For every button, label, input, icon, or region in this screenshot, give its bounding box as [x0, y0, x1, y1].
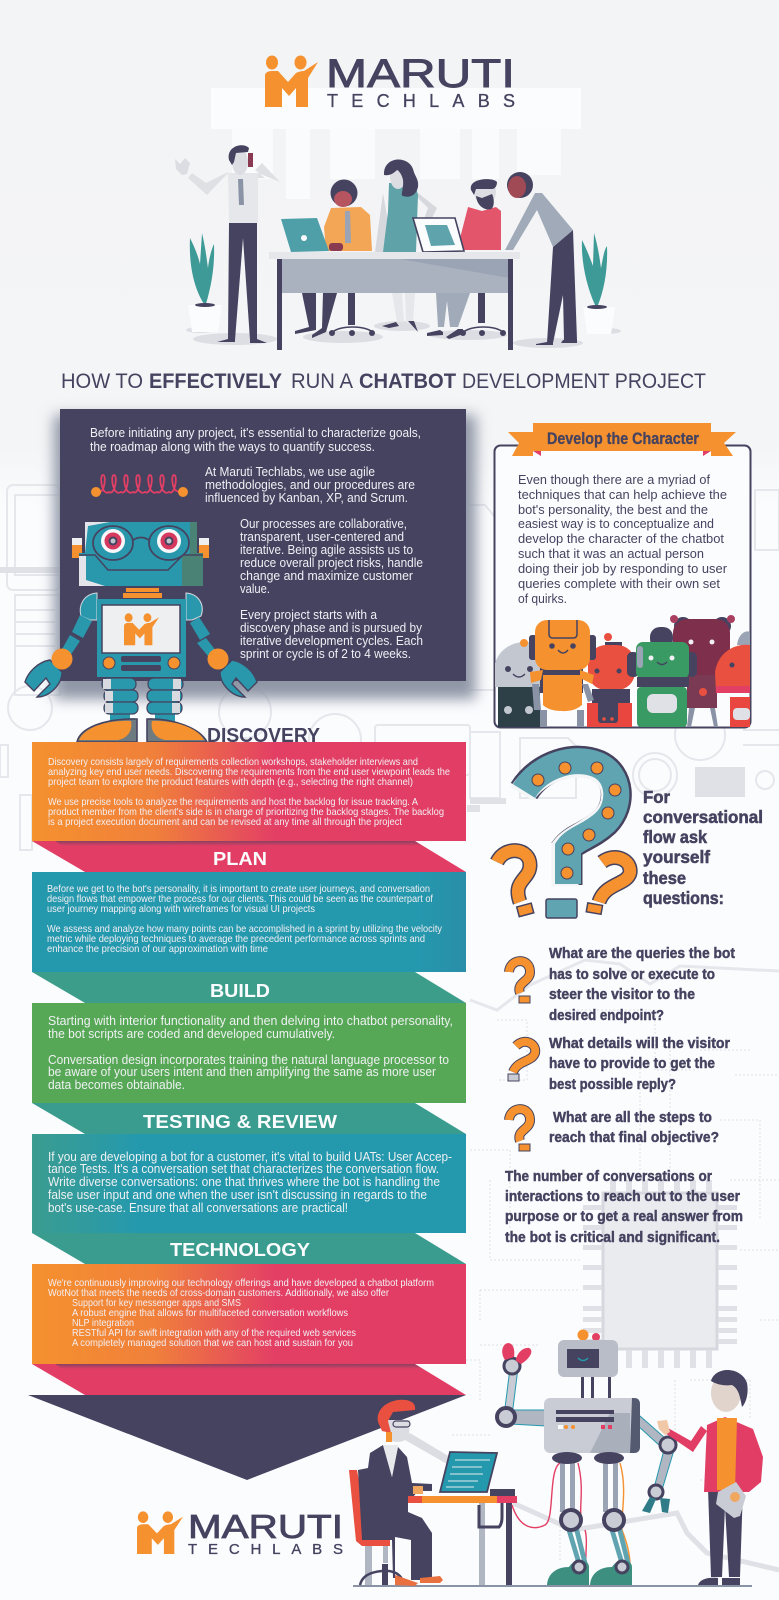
logo wordmark: MARUTI [326, 52, 515, 96]
fold: testing and review [32, 1103, 466, 1134]
discovery text: analyzing key end user needs. Discovering the requirements from the end user viewpoint leads the [48, 766, 450, 778]
discovery text [48, 756, 450, 828]
robot legs [102, 678, 183, 722]
technology text: A robust engine that allows for multifaceted conversation workflows [72, 1307, 348, 1319]
closing statement [505, 1169, 743, 1246]
plan text: user journey mapping along with wireframes for visual UI projects [47, 903, 315, 915]
character text: bot's personality, the best and the [518, 502, 708, 517]
grey robot [495, 639, 543, 727]
character text: doing their job by responding to user [518, 561, 728, 576]
monitor [413, 218, 464, 252]
illustration: robot and developers [349, 1330, 763, 1587]
build text: Starting with interior functionality and then delving into chatbot personality, [48, 1014, 453, 1028]
technology text: WotNot that meets the needs of cross-domain customers. Additionally, we also offer [48, 1287, 389, 1299]
robot body [97, 599, 186, 677]
question 1 [509, 946, 735, 1024]
ribbon banner [508, 423, 736, 456]
conversational flow heading: flow ask [643, 827, 707, 847]
cycle text: Every project starts with a [240, 607, 378, 622]
plan text: We assess and analyze how many points can be accomplished in a sprint by utilizing the velocity [47, 923, 443, 935]
closing arrow [28, 1395, 466, 1480]
seated man [295, 180, 375, 338]
character text: such that it was an actual person [518, 546, 704, 561]
closing statement: The number of conversations or [505, 1169, 712, 1185]
build text: be aware of your users intent and then amplifying the same as more user [48, 1065, 436, 1079]
question 3 text: reach that final objective? [549, 1130, 719, 1146]
robot arms [25, 593, 257, 697]
testing text: If you are developing a bot for a customer, it's vital to build UATs: User Accep- [48, 1150, 452, 1164]
logo subtitle: TECHLABS [188, 1541, 343, 1558]
testing text: bot's use-case. Ensure that all conversations are practical! [48, 1201, 348, 1215]
build text: data becomes obtainable. [48, 1078, 185, 1092]
technology text: NLP integration [72, 1317, 134, 1329]
agile squiggle icon [91, 475, 188, 497]
cycle text [240, 607, 423, 661]
intro text: the roadmap along with the ways to quantify success. [90, 439, 375, 454]
process text: reduce overall project risks, handle [240, 555, 423, 570]
title [61, 370, 706, 393]
panel: plan [32, 872, 466, 972]
conversational flow heading: For [643, 787, 670, 807]
discovery text: project team to explore the product features with depth (e.g., selecting the right channel) [48, 776, 413, 788]
plant right [582, 233, 615, 334]
man on phone [175, 145, 280, 343]
robot neck [581, 1377, 611, 1398]
footer logo [137, 1508, 343, 1558]
character text [518, 472, 728, 606]
robot group [495, 615, 750, 727]
panel: build [32, 1003, 466, 1103]
fold: plan [32, 841, 466, 872]
plant left [188, 233, 222, 332]
closing statement: the bot is critical and significant. [505, 1230, 720, 1246]
testing text [48, 1150, 452, 1215]
robot legs and feet [547, 1462, 632, 1585]
laptop [281, 218, 329, 252]
question 1 text [549, 946, 735, 1024]
plan text [47, 883, 443, 955]
green robot [627, 627, 697, 727]
orange question mark left [497, 851, 534, 917]
process text: change and maximize customer [240, 568, 414, 583]
character text: of quirks. [518, 591, 567, 606]
robot feet [77, 719, 207, 742]
orange robot [529, 620, 596, 727]
title: EFFECTIVELY [149, 370, 282, 393]
desk [269, 252, 520, 350]
logo mark [265, 56, 318, 107]
maroon robot [670, 615, 735, 727]
title: CHATBOT [359, 370, 456, 393]
cycle text: sprint or cycle is of 2 to 4 weeks. [240, 646, 411, 661]
fold: build [32, 972, 466, 1003]
robot torso [544, 1398, 640, 1464]
question 2 [508, 1036, 730, 1093]
title: HOW TO [61, 370, 143, 393]
ribbon banner: Develop the Character [547, 429, 699, 448]
agile text [205, 464, 415, 505]
plan text: metric while deploying techniques to average the precedent performance across sprints and [47, 933, 425, 945]
logo subtitle: TECHLABS [327, 91, 515, 111]
plan text: Before we get to the bot's personality, it is important to create user journeys, and conversation [47, 883, 430, 895]
technology text [48, 1277, 434, 1349]
robot controls [103, 656, 180, 671]
conversational flow heading [643, 787, 763, 908]
robot head [72, 522, 209, 586]
technology text: RESTful API for swift integration with any of the required web services [72, 1327, 356, 1339]
question 3 text: What are all the steps to [553, 1110, 712, 1126]
process text: transparent, user-centered and [240, 529, 404, 544]
discovery text: We use precise tools to analyze the requirements and host the backlog for issue tracking. A [48, 796, 418, 808]
fold: build: BUILD [210, 980, 270, 1001]
technology text: A completely managed solution that we can host and sustain for you [72, 1337, 353, 1349]
fold: technology: TECHNOLOGY [170, 1239, 311, 1260]
character text: Even though there are a myriad of [518, 472, 710, 487]
panel: develop the character [494, 423, 750, 728]
robot neck [123, 588, 162, 598]
process text [240, 516, 423, 596]
panel: agile intro [54, 409, 476, 699]
developer at desk [349, 1400, 450, 1586]
cycle text: iterative development cycles. Each [240, 633, 423, 648]
question 2 text: have to provide to get the [549, 1056, 715, 1072]
panel: technology [32, 1264, 466, 1364]
character text: develop the character of the chatbot [518, 531, 724, 546]
question 2 text: What details will the visitor [549, 1036, 730, 1052]
question 2 text [549, 1036, 730, 1093]
title: DEVELOPMENT PROJECT [462, 370, 706, 393]
question 1 text: steer the visitor to the [549, 987, 695, 1003]
orange question mark right [586, 858, 630, 914]
fold: closing [32, 1364, 466, 1395]
title: RUN A [291, 370, 353, 393]
testing text: false user input and one when the user isn't discussing in regards to the [48, 1188, 427, 1202]
banner stack [28, 725, 466, 1480]
question marks illustration [497, 761, 630, 918]
icon: question mark [508, 1042, 535, 1081]
robot screen logo [124, 613, 159, 645]
robot screen [102, 605, 180, 653]
question 1 text: What are the queries the bot [549, 946, 735, 962]
process text: iterative. Being agile assists us to [240, 542, 413, 557]
question 3 text [549, 1110, 719, 1146]
cycle text: discovery phase and is pursued by [240, 620, 422, 635]
character text: queries complete with their own set [518, 576, 720, 591]
icon: question mark [509, 1109, 530, 1151]
large question dot [546, 899, 577, 918]
question 1 text: desired endpoint? [549, 1008, 664, 1024]
plan text: enhance the precision of our approximation with time [47, 943, 268, 955]
conversational flow heading: these [643, 868, 686, 888]
fold: plan: PLAN [213, 848, 267, 869]
agile text: At Maruti Techlabs, we use agile [205, 464, 375, 479]
robot raised arm [497, 1343, 546, 1426]
robot lowered arm [637, 1416, 676, 1513]
panel: testing and review [32, 1134, 466, 1233]
conversational flow heading: conversational [643, 807, 763, 827]
closing statement: interactions to reach out to the user [505, 1189, 740, 1205]
testing text: tance Tests. It's a conversation set that characterizes the conversation flow. [48, 1162, 439, 1176]
intro text [90, 425, 421, 454]
icon: question mark [509, 961, 530, 1003]
technology text: We're continuously improving our technology offerings and have developed a chatbot platform [48, 1277, 434, 1289]
coral robot [715, 631, 750, 727]
discovery text: is a project execution document and can be revised at any time all through the project [48, 816, 402, 828]
process text: Our processes are collaborative, [240, 516, 407, 531]
bearded man [427, 179, 506, 339]
robot head [558, 1330, 618, 1377]
process text: value. [240, 581, 270, 596]
agile text: methodologies, and our procedures are [205, 477, 415, 492]
fold: technology [32, 1233, 466, 1264]
chip graphic [583, 1180, 737, 1368]
conversational flow heading: questions: [643, 888, 724, 908]
question 1 text: has to solve or execute to [549, 967, 715, 983]
large question mark [522, 761, 621, 886]
agile text: influenced by Kanban, XP, and Scrum. [205, 490, 408, 505]
build text: the bot scripts are coded and developed cumulatively. [48, 1027, 335, 1041]
closing statement: purpose or to get a real answer from [505, 1209, 743, 1225]
question 3 [509, 1109, 719, 1151]
header logo [265, 52, 515, 111]
technology text: Support for key messenger apps and SMS [72, 1297, 241, 1309]
wires [512, 1463, 630, 1565]
discovery text: Discovery consists largely of requirements collection workshops, stakeholder interviews and [48, 756, 418, 768]
woman [375, 159, 437, 332]
intro text: Before initiating any project, it's essential to characterize goals, [90, 425, 421, 440]
build text: Conversation design incorporates training the natural language processor to [48, 1053, 449, 1067]
build text [48, 1014, 453, 1092]
fold: testing and review: TESTING & REVIEW [143, 1111, 338, 1132]
illustration: team around desk [175, 145, 621, 350]
laptop on desk [440, 1452, 497, 1492]
logo wordmark: MARUTI [188, 1508, 343, 1545]
conversational flow heading: yourself [643, 847, 710, 867]
logo mark [137, 1511, 183, 1554]
plan text: design flows that empower the process for our clients. This could be seen as the counterpart of [47, 893, 433, 905]
panel: discovery [32, 742, 466, 841]
ground line [353, 1585, 752, 1587]
question 2 text: best possible reply? [549, 1077, 676, 1093]
discovery text: product member from the client's side is in charge of prioritizing the backlog stages. The backlog [48, 806, 444, 818]
standing man [657, 1370, 763, 1585]
red robot [587, 633, 635, 727]
floor shadows [186, 321, 621, 348]
character text: techniques that can help achieve the [518, 487, 727, 502]
testing text: Write diverse conversations: one that thrives where the bot is handling the [48, 1175, 440, 1189]
character text: easiest way is to conceptualize and [518, 516, 714, 531]
desk [408, 1489, 517, 1585]
heading: discovery: DISCOVERY [207, 725, 321, 747]
illustration: big robot [25, 522, 257, 742]
leaning man [505, 172, 577, 345]
